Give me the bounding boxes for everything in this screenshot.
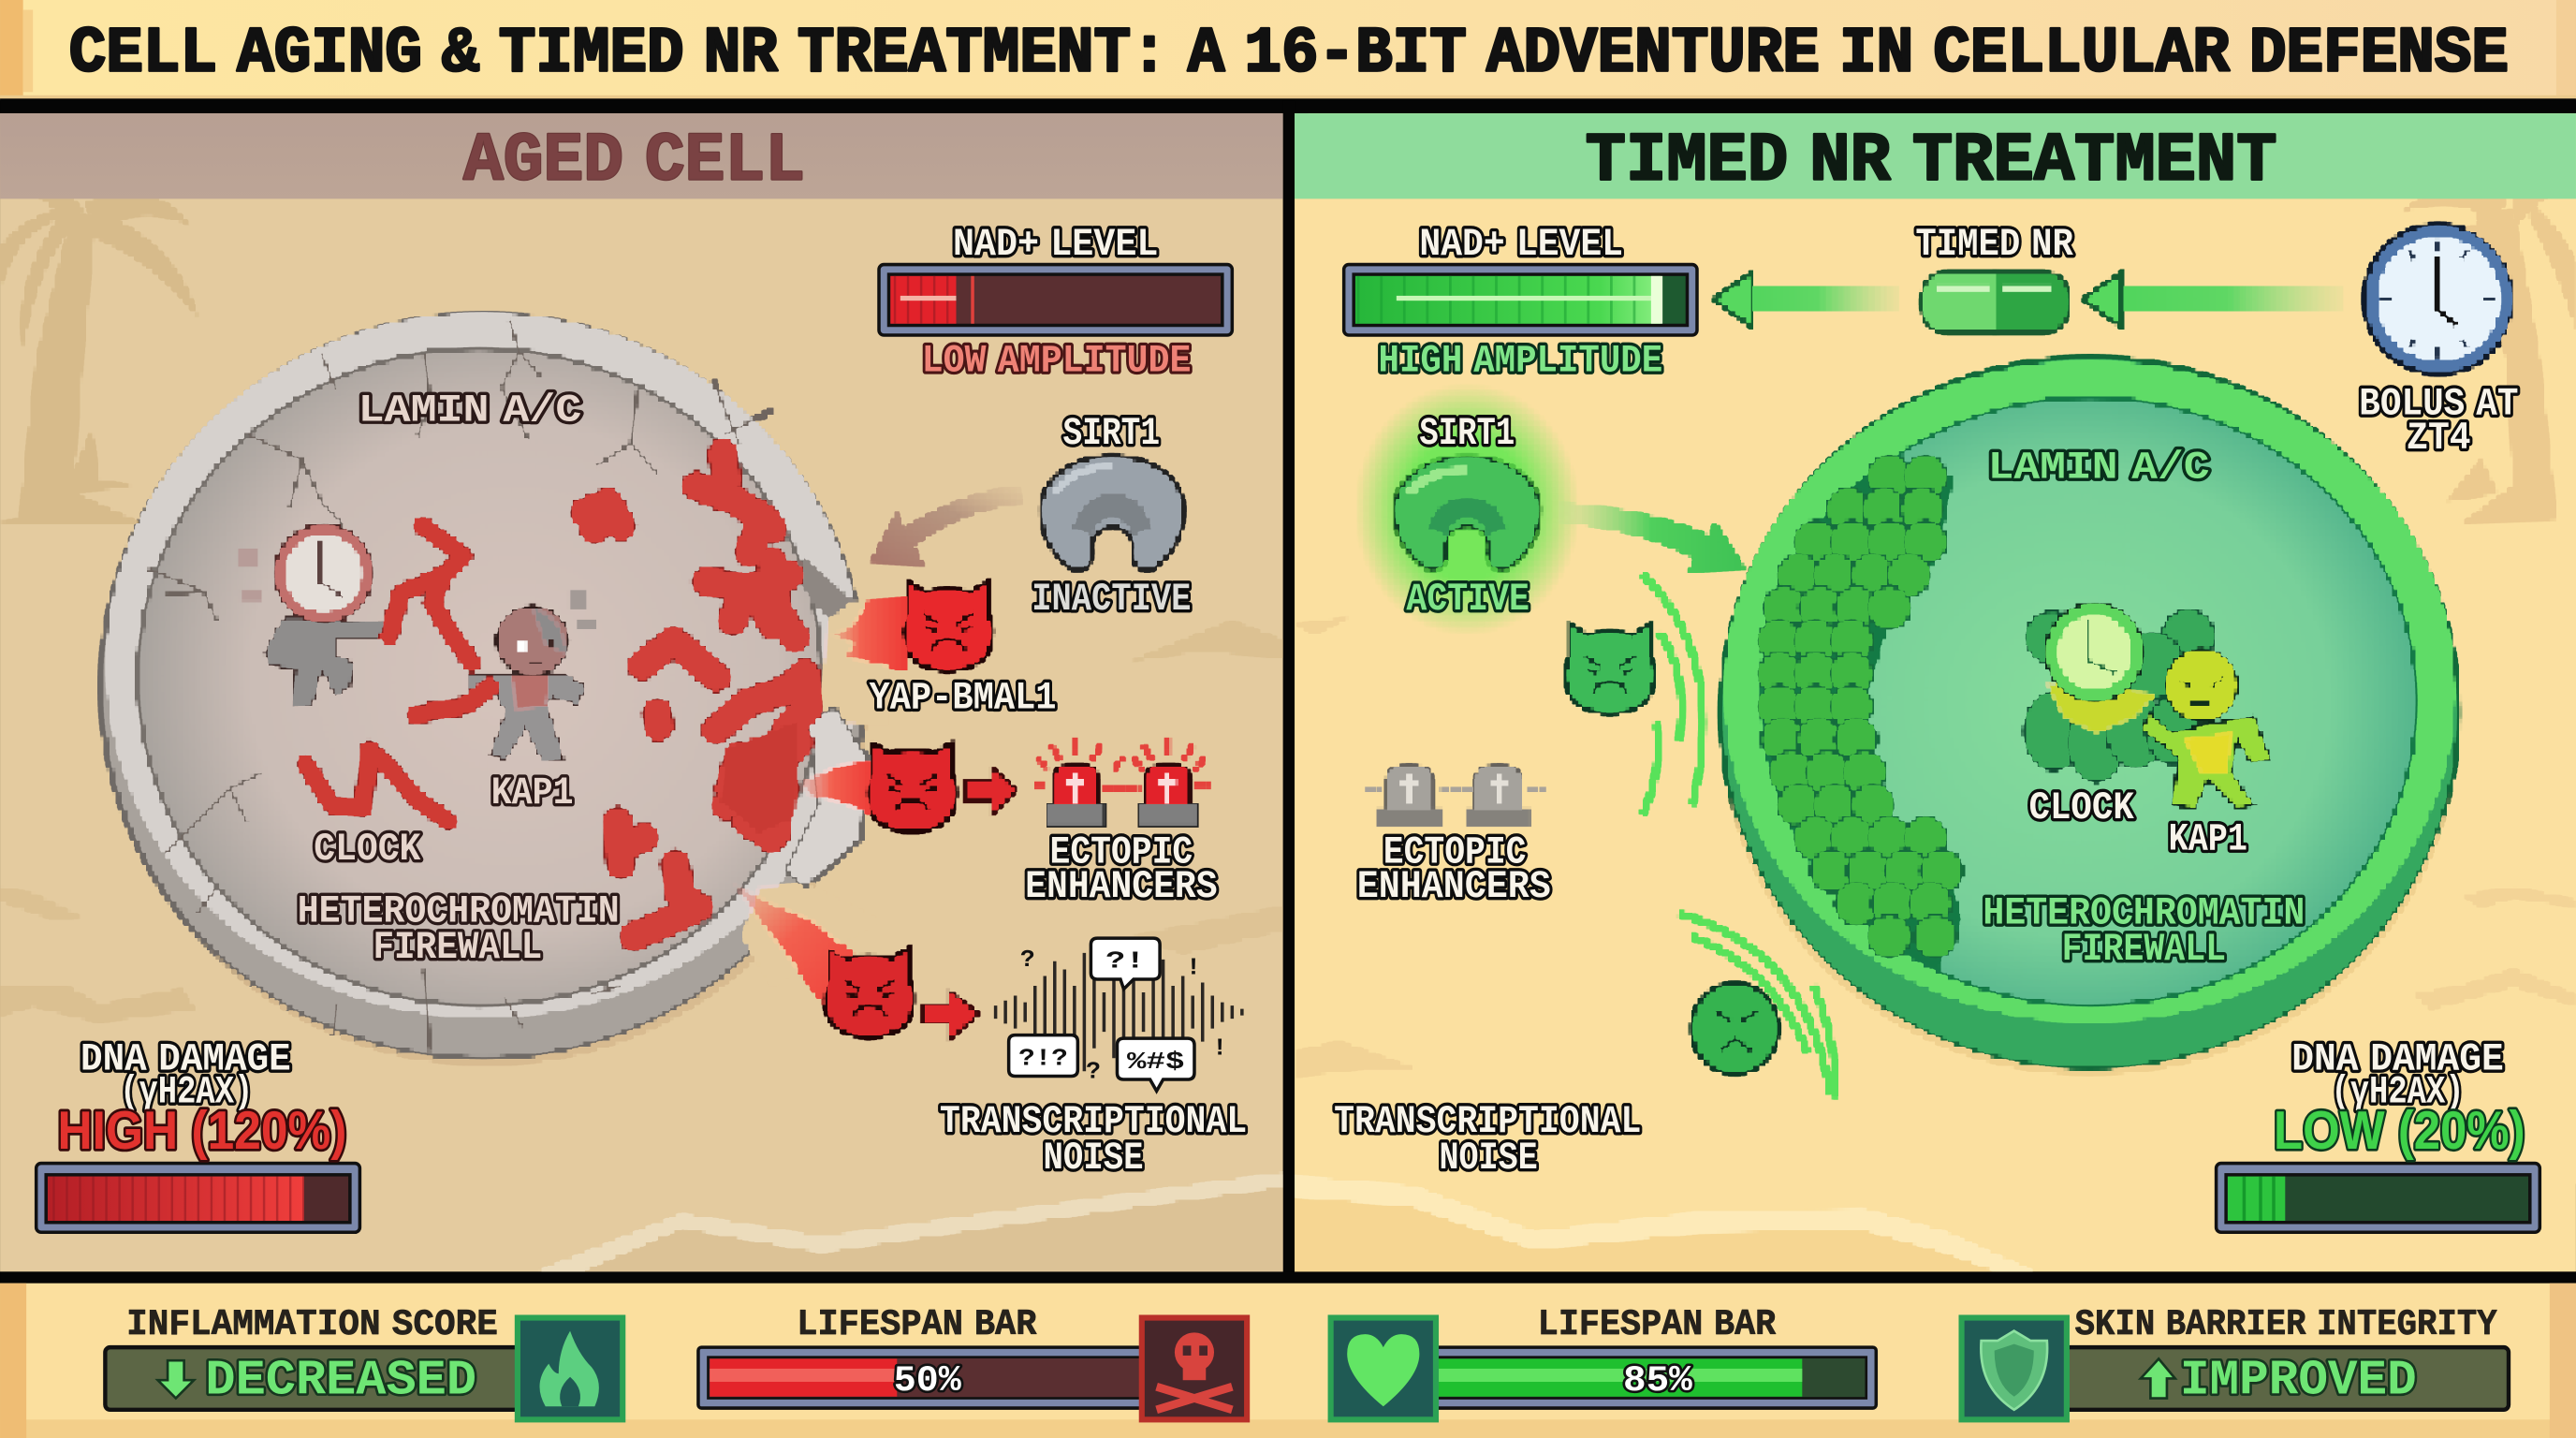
red invader causing noise with trail [735,884,913,1036]
labels: aged cell: CLOCK [314,827,421,872]
damaged rim gaps [822,601,887,723]
icon: skull and crossbones [1142,1318,1247,1419]
arrow to transcriptional noise [923,992,977,1038]
background: palm tree and dunes [1298,165,2576,1077]
SIRT1 inactive: grey horseshoe [1042,457,1183,569]
lifespan bar: treated 85%: 85% [1623,1360,1693,1401]
labels: aged cell: LAMIN A/C [359,388,581,433]
skin barrier integrity: improved: IMPROVED [2180,1352,2417,1408]
title banner: CELL AGING & TIMED NR TREATMENT: A 16-BIT ADVENTURE IN CELLULAR DEFENSE [69,17,2509,90]
inflammation score: decreased [105,1304,622,1419]
labels: timed NR treatment: FIREWALL [2062,927,2226,972]
panel heading: timed NR treatment: TIMED NR TREATMENT [1586,123,2277,200]
labels: aged cell: NOISE [1044,1136,1144,1181]
ectopic enhancers: inactive grey tombstones [1367,766,1544,825]
arrow: NR raises NAD+ [1715,274,1899,325]
lifespan bar: treated 85%: LIFESPAN BAR [1538,1304,1777,1345]
KAP1 yellow-green character [2143,649,2271,808]
labels: timed NR treatment: BOLUS AT [2359,381,2519,426]
lifespan bar: aged 50% [698,1304,1247,1419]
labels: timed NR treatment: ENHANCERS [1357,864,1551,909]
icon: heart [1331,1318,1436,1419]
nucleus: intact lamin A/C shell [1721,359,2458,1075]
CLOCK protein: broken clock character [237,524,598,707]
ectopic enhancers: red alarms [1035,740,1209,825]
lifespan bar: aged 50%: LIFESPAN BAR [797,1304,1037,1345]
YAP-BMAL1 red invader with trail [829,583,992,670]
labels: aged cell: (γH2AX) [120,1070,253,1115]
labels: timed NR treatment: HIGH AMPLITUDE [1379,339,1662,384]
labels: aged cell: DNA DAMAGE [80,1037,291,1082]
arrow: blocked SIRT1 signal [871,486,1022,565]
labels: aged cell: KAP1 [491,770,574,815]
KAP1 character [468,607,585,761]
panel heading: aged cell [0,113,1283,200]
DNA damage low gauge [2217,1164,2539,1232]
nucleus: cracked lamin A/C shell [102,314,887,1064]
wall clock: bolus at ZT4 [2364,225,2512,373]
labels: timed NR treatment: KAP1 [2169,816,2247,861]
defeated green invader and shield swoosh [1566,575,1703,814]
labels: aged cell: TRANSCRIPTIONAL [940,1099,1247,1144]
DNA damage high gauge [37,1164,359,1232]
transcriptional noise: waveform and speech bubbles: ? [1086,1057,1101,1085]
panel heading: timed NR treatment [1295,113,2576,200]
arrow: SIRT1 reinforces shell [1560,503,1745,572]
transcriptional noise: waveform and speech bubbles: ! [1212,1034,1227,1063]
panel: aged cell [0,113,1283,1273]
NAD+ level high gauge [1344,265,1697,335]
inflammation score: decreased: INFLAMMATION SCORE [126,1304,498,1345]
labels: aged cell: ENHANCERS [1025,864,1218,909]
defeated green invader below and swoosh [1679,914,1835,1097]
red chromatin snakes and scattered heterochromatin [305,453,809,936]
panel heading: aged cell: AGED CELL [463,123,805,200]
icon: shield [1962,1318,2067,1419]
labels: timed NR treatment: LAMIN A/C [1988,446,2210,491]
CLOCK protein in green cluster [2024,603,2215,782]
panel: timed NR treatment [1295,113,2576,1273]
transcriptional noise: waveform and speech bubbles: ?! [1105,947,1145,976]
labels: timed NR treatment: TIMED NR [1915,222,2074,267]
labels: timed NR treatment: ZT4 [2407,416,2471,461]
labels: aged cell: HETEROCHROMATIN [298,889,620,934]
timed NR capsule [1922,272,2069,332]
labels: timed NR treatment: NAD+ LEVEL [1419,222,1623,267]
labels: aged cell: SIRT1 [1063,411,1160,456]
bottom status bar [0,1284,2576,1438]
labels: timed NR treatment: HETEROCHROMATIN [1983,890,2305,935]
lifespan bar: treated 85% [1331,1304,1876,1419]
labels: timed NR treatment: TRANSCRIPTIONAL [1334,1099,1641,1144]
labels: aged cell: YAP-BMAL1 [869,675,1057,720]
arrow: bolus to capsule [2085,274,2343,325]
labels: timed NR treatment: LOW (20%) [2274,1101,2525,1161]
arrow to ectopic enhancers [966,769,1016,814]
labels: timed NR treatment [1334,222,2525,1181]
SIRT1 active: glowing green horseshoe [1355,385,1579,634]
transcriptional noise: waveform and speech bubbles: ! [1186,954,1201,982]
labels: aged cell: NAD+ LEVEL [953,222,1158,267]
transcriptional noise: waveform and speech bubbles [996,938,1242,1091]
labels: aged cell: ECTOPIC [1050,829,1193,874]
labels: timed NR treatment: SIRT1 [1419,411,1515,456]
skin barrier integrity: improved [1962,1304,2509,1419]
labels: timed NR treatment: (γH2AX) [2331,1070,2465,1115]
labels: aged cell: FIREWALL [373,925,542,970]
inflammation score: decreased: DECREASED [205,1352,476,1408]
labels: timed NR treatment: DNA DAMAGE [2291,1037,2504,1082]
red invader attacking enhancers [802,744,956,831]
labels: aged cell: HIGH (120%) [57,1101,346,1161]
labels: aged cell: INACTIVE [1032,577,1191,622]
labels: timed NR treatment: ECTOPIC [1383,829,1526,874]
labels: timed NR treatment: NOISE [1439,1136,1538,1181]
background: sand wave [534,1173,1283,1273]
transcriptional noise: waveform and speech bubbles: ? [1020,946,1035,974]
icon: flame [518,1318,622,1419]
background: sand wave [1295,1177,2037,1273]
labels: aged cell: LOW AMPLITUDE [922,339,1191,384]
NAD+ level low gauge [879,265,1232,335]
labels: aged cell [57,222,1247,1181]
background: palm tree and dunes [0,166,1283,1022]
transcriptional noise: waveform and speech bubbles: %#$ [1127,1048,1184,1076]
transcriptional noise: waveform and speech bubbles: ?!? [1018,1044,1068,1072]
heterochromatin firewall: packed green blocks [1758,453,1963,969]
skin barrier integrity: improved: SKIN BARRIER INTEGRITY [2075,1304,2497,1345]
lifespan bar: aged 50%: 50% [894,1360,962,1401]
labels: timed NR treatment: ACTIVE [1406,577,1530,622]
labels: timed NR treatment: CLOCK [2029,785,2134,830]
